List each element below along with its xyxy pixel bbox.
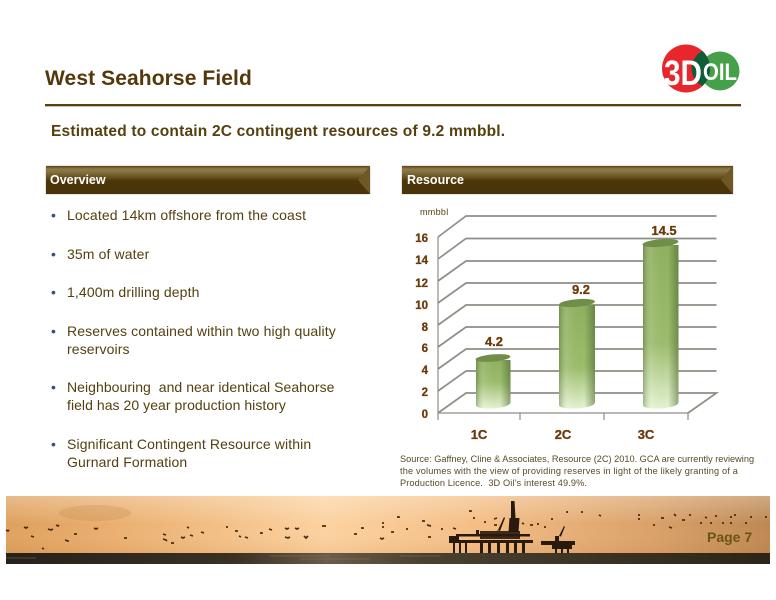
- y axis labels: 0: [422, 409, 428, 421]
- bullet 6: Gurnard Formation: [67, 454, 187, 470]
- y axis labels: 12: [415, 278, 428, 290]
- y axis labels: 14: [415, 255, 429, 267]
- y axis labels: 10: [415, 300, 428, 312]
- bullet 5: [51, 379, 334, 413]
- photo banner: offshore platforms at sunset: [6, 496, 770, 564]
- source note: the volumes with the view of providing reserves in light of the likely granting of a: [400, 466, 738, 476]
- bullet 2: 35m of water: [67, 246, 149, 262]
- subtitle: Estimated to contain 2C contingent resources of 9.2 mmbbl.: [51, 123, 505, 140]
- sea: [6, 553, 770, 564]
- bar chart: resource in mmbbl: [415, 207, 719, 442]
- bullet 5: Neighbouring and near identical Seahorse: [67, 379, 334, 395]
- y axis labels: 16: [415, 233, 428, 245]
- logo: 3D Oil: 3D: [664, 54, 702, 93]
- sky: [6, 496, 770, 553]
- data labels: 14.5: [651, 223, 677, 238]
- data labels: [485, 223, 677, 349]
- y axis labels: 6: [422, 343, 428, 355]
- panel heading: resource: [402, 166, 733, 194]
- y axis labels: 8: [422, 322, 429, 334]
- y axis labels: [415, 233, 429, 421]
- panel: overview bullet list: [51, 207, 336, 470]
- cloud: [59, 505, 131, 521]
- gridlines: [438, 216, 716, 413]
- title: West Seahorse Field: [45, 67, 252, 90]
- bullet 1: Located 14km offshore from the coast: [67, 207, 306, 223]
- bar: 2C 9.2: [559, 298, 595, 409]
- data labels: 9.2: [572, 282, 590, 297]
- panel heading: resource: Resource: [407, 173, 464, 187]
- logo: 3D Oil: [662, 44, 740, 93]
- oil platform: small: [541, 526, 575, 553]
- x axis labels: [471, 427, 655, 442]
- bullet 6: Significant Contingent Resource within: [67, 436, 311, 452]
- bullet 3: 1,400m drilling depth: [67, 284, 200, 300]
- bullet 4: [51, 323, 336, 357]
- bullet 4: Reserves contained within two high quality: [67, 323, 336, 339]
- axes: [438, 237, 688, 420]
- logo: 3D Oil: OIL: [703, 59, 737, 86]
- oil platform: main: [449, 501, 533, 553]
- source note: [400, 454, 754, 488]
- unit label: mmbbl: [420, 207, 449, 217]
- panel heading: overview: [46, 166, 370, 194]
- page number: Page 7: [707, 529, 752, 545]
- x axis labels: 3C: [638, 427, 655, 442]
- bullet 3: •: [51, 284, 56, 300]
- bar: 1C 4.2: [475, 353, 511, 409]
- bullet 5: •: [51, 379, 56, 395]
- bullet 6: [51, 436, 311, 470]
- bullet 4: •: [51, 323, 56, 339]
- bullet 6: •: [51, 436, 56, 452]
- source note: Source: Gaffney, Cline & Associates, Resource (2C) 2010. GCA are currently reviewing: [400, 454, 754, 464]
- birds: [6, 511, 767, 549]
- bullet 5: field has 20 year production history: [67, 397, 286, 413]
- panel heading: overview: Overview: [50, 173, 106, 187]
- bullet 4: reservoirs: [67, 341, 130, 357]
- y axis labels: 2: [422, 387, 428, 399]
- bullet 1: •: [51, 207, 56, 223]
- x axis labels: 1C: [471, 427, 488, 442]
- x axis labels: 2C: [555, 427, 572, 442]
- y axis labels: 4: [422, 365, 429, 377]
- sea glint: [6, 556, 440, 559]
- title rule: [45, 104, 741, 106]
- bar: 3C 14.5: [642, 238, 679, 409]
- source note: Production Licence. 3D Oil’s interest 49.9%.: [400, 478, 587, 488]
- data labels: 4.2: [485, 334, 503, 349]
- bullet 2: •: [51, 246, 56, 262]
